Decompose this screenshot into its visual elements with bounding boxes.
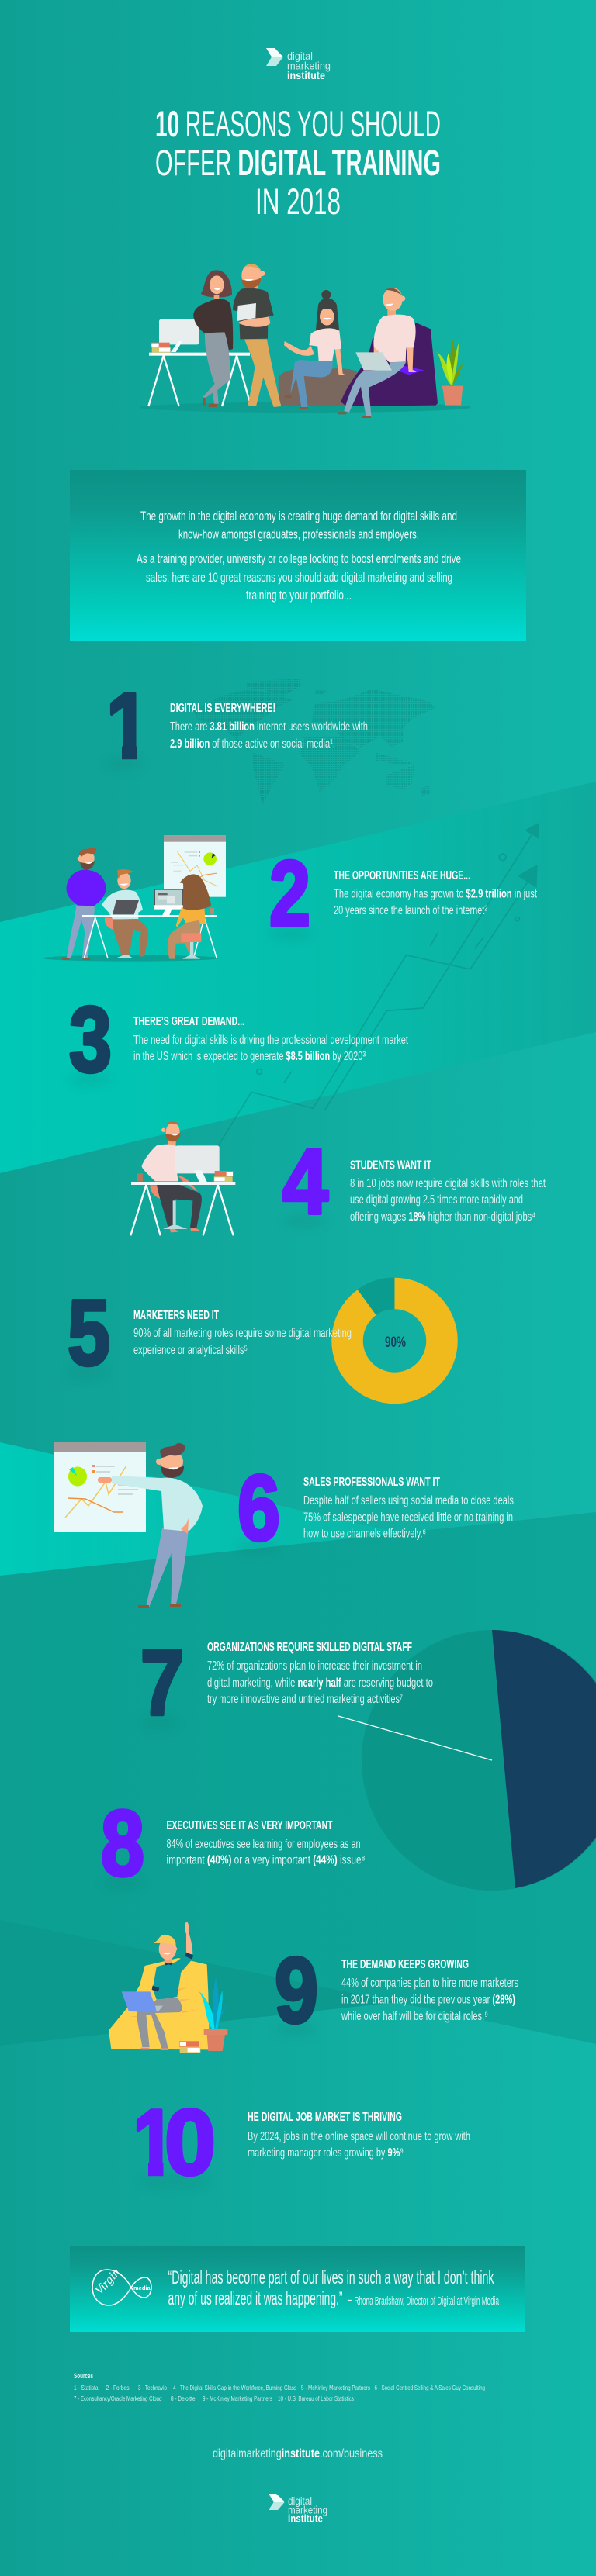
text: 20 years since the launch of the internet²	[334, 904, 487, 917]
text: THERE’S GREAT DEMAND...	[133, 1015, 244, 1028]
reason 5	[67, 1281, 352, 1385]
illustration: team of four in office	[140, 264, 471, 418]
text	[303, 1476, 516, 1540]
sources: 7 - Econsultancy/Oracle Marketing Cloud	[74, 2395, 162, 2402]
seated man with laptop	[338, 288, 417, 418]
woman in black sweater	[193, 270, 233, 407]
purple beanbag	[341, 323, 438, 406]
sources: 6 - Social Centred Selling & A Sales Guy Consulting	[374, 2384, 485, 2391]
seated woman from behind	[168, 874, 211, 959]
text	[133, 1309, 352, 1357]
text: try more innovative and untried marketing activities⁷	[207, 1693, 403, 1706]
man in purple shirt	[62, 848, 106, 960]
man with laptop	[122, 1922, 193, 2050]
man pointing	[98, 1443, 203, 1608]
illustration: presenter at chart	[54, 1442, 203, 1608]
text	[207, 1641, 433, 1706]
intro panel: know-how amongst graduates, professionals and employers.	[178, 527, 419, 541]
text: how to use channels effectively.⁶	[303, 1528, 426, 1540]
desk and monitor	[82, 889, 217, 958]
man	[142, 1121, 202, 1232]
number 4: 4	[282, 1130, 328, 1234]
intro panel: sales, here are 10 great reasons you should add digital marketing and selling	[146, 571, 452, 585]
Virgin Media logo	[92, 2266, 151, 2305]
illustration: man on yellow beanbag	[109, 1922, 230, 2053]
pie chart: reason 7	[338, 1630, 596, 1891]
chart board	[164, 835, 226, 897]
bearded man with tablet	[233, 264, 281, 407]
text	[334, 869, 537, 917]
text: experience or analytical skills⁵	[133, 1344, 248, 1357]
text: MARKETERS NEED IT	[133, 1309, 219, 1322]
text: in 2017 than they did the previous year (28%)	[341, 1993, 515, 2007]
text: The need for digital skills is driving the professional development market	[133, 1034, 408, 1047]
number 10: 0	[165, 2091, 216, 2194]
reason 1	[110, 692, 368, 760]
sources: 1 - Statista	[74, 2384, 99, 2391]
sources: 2 - Forbes	[106, 2384, 129, 2391]
number 5: 5	[68, 1281, 110, 1385]
text: THE DEMAND KEEPS GROWING	[341, 1958, 469, 1971]
Virgin Media logo: media	[133, 2284, 151, 2291]
potted plant	[437, 339, 466, 406]
footer logo: marketing	[288, 2503, 327, 2516]
quote panel	[70, 2246, 525, 2332]
logo: digital marketing institute: marketing	[287, 59, 331, 71]
sources: 5 - McKinley Marketing Partners	[301, 2384, 370, 2391]
text: in the US which is expected to generate $8.5 billion by 2020³	[133, 1050, 366, 1063]
text: use digital growing 2.5 times more rapidly and	[350, 1193, 523, 1207]
text: By 2024, jobs in the online space will continue to grow with	[248, 2130, 470, 2143]
potted plant	[199, 1977, 230, 2051]
intro panel: The growth in the digital economy is creating huge demand for digital skills and	[140, 509, 457, 523]
text: STUDENTS WANT IT	[350, 1159, 431, 1172]
number 7: 7	[140, 1631, 184, 1735]
number 1	[110, 692, 137, 760]
text: 44% of companies plan to hire more marketers	[341, 1977, 518, 1990]
illustration: man at desk	[130, 1121, 235, 1235]
reason 3	[68, 988, 408, 1092]
text	[170, 702, 368, 751]
reason 7	[139, 1631, 433, 1735]
seated man with laptop	[102, 869, 148, 958]
intro panel: training to your portfolio...	[246, 589, 352, 603]
text: There are 3.81 billion internet users worldwide with	[170, 720, 368, 734]
desk	[130, 1145, 235, 1235]
text: 90% of all marketing roles require some digital marketing	[133, 1327, 352, 1340]
title: OFFER DIGITAL TRAINING	[155, 142, 441, 183]
reason 4	[282, 1130, 546, 1234]
number 10	[137, 2108, 214, 2177]
books	[179, 2041, 200, 2053]
title: IN 2018	[255, 181, 341, 222]
footer logo: institute	[288, 2512, 323, 2525]
sources: 10 - U.S. Bureau of Labor Statistics	[278, 2395, 354, 2402]
sources: 8 - Deloitte	[171, 2395, 196, 2402]
number 1: 1	[106, 674, 149, 778]
growth arrow chart	[219, 823, 539, 1145]
number 3: 3	[69, 988, 112, 1092]
number 8: 8	[101, 1791, 144, 1895]
chart board	[54, 1442, 146, 1532]
text: DIGITAL IS EVERYWHERE!	[170, 702, 275, 715]
website url: digitalmarketinginstitute.com/business	[213, 2447, 383, 2460]
text: 2.9 billion of those active on social media¹.	[170, 737, 335, 751]
logo: digital marketing institute	[266, 48, 331, 81]
number 10: 1	[133, 2091, 175, 2194]
text	[341, 1958, 518, 2023]
text: HE DIGITAL JOB MARKET IS THRIVING	[248, 2111, 402, 2124]
sources: 9 - McKinley Marketing Partners	[203, 2395, 272, 2402]
text: ORGANIZATIONS REQUIRE SKILLED DIGITAL STAFF	[207, 1641, 412, 1654]
reason 10	[137, 2108, 470, 2177]
reason 9	[275, 1939, 518, 2042]
logo: digital marketing institute: digital	[287, 50, 313, 62]
reason 6	[237, 1456, 516, 1560]
donut chart: 90%	[348, 1278, 442, 1388]
text	[133, 1015, 408, 1063]
brown pouf	[279, 368, 357, 406]
reason 2	[269, 842, 537, 946]
text	[248, 2111, 470, 2160]
text: digital marketing, while nearly half are reserving budget to	[207, 1676, 433, 1690]
donut chart: 90%: 90%	[385, 1335, 406, 1351]
text: 84% of executives see learning for employees as an	[166, 1838, 360, 1851]
text: THE OPPORTUNITIES ARE HUGE...	[334, 869, 470, 882]
text: EXECUTIVES SEE IT AS VERY IMPORTANT	[166, 1819, 333, 1832]
text	[350, 1159, 546, 1224]
text	[166, 1819, 365, 1867]
quote: any of us realized it was happening.”	[168, 2288, 343, 2309]
intro panel: As a training provider, university or college looking to boost enrolments and drive	[137, 552, 461, 566]
text: important (40%) or a very important (44%) issue⁸	[166, 1853, 365, 1867]
number 6: 6	[237, 1456, 280, 1560]
seated woman	[284, 290, 347, 409]
sources: Sources	[74, 2372, 93, 2381]
beanbag	[109, 1958, 210, 2049]
logo: digital marketing institute: institute	[287, 69, 325, 81]
quote: -	[347, 2291, 352, 2308]
text: offering wages 18% higher than non-digital jobs⁴	[350, 1210, 535, 1224]
text: 72% of organizations plan to increase their investment in	[207, 1659, 422, 1673]
footer logo	[269, 2494, 327, 2525]
text: The digital economy has grown to $2.9 trillion in just	[334, 887, 537, 901]
footer logo: digital	[288, 2495, 312, 2507]
text: marketing manager roles growing by 9%⁹	[248, 2146, 404, 2160]
reason 8	[101, 1791, 365, 1895]
quote	[168, 2267, 499, 2309]
sources: 4 - The Digital Skills Gap in the Workforce, Burning Glass	[173, 2384, 296, 2391]
chair	[150, 1176, 198, 1200]
sources: 3 - Technavio	[138, 2384, 167, 2391]
text: SALES PROFESSIONALS WANT IT	[303, 1476, 440, 1489]
Virgin Media logo: Virgin	[92, 2266, 123, 2298]
text: while over half will be for digital roles.⁹	[341, 2010, 488, 2023]
title	[155, 103, 441, 222]
desk with monitor	[148, 319, 250, 406]
intro panel	[70, 470, 526, 641]
number 9: 9	[275, 1939, 318, 2042]
illustration: office meeting with board	[43, 835, 226, 962]
sources	[74, 2372, 485, 2402]
number 2: 2	[269, 842, 310, 946]
dotted world map	[194, 678, 435, 806]
